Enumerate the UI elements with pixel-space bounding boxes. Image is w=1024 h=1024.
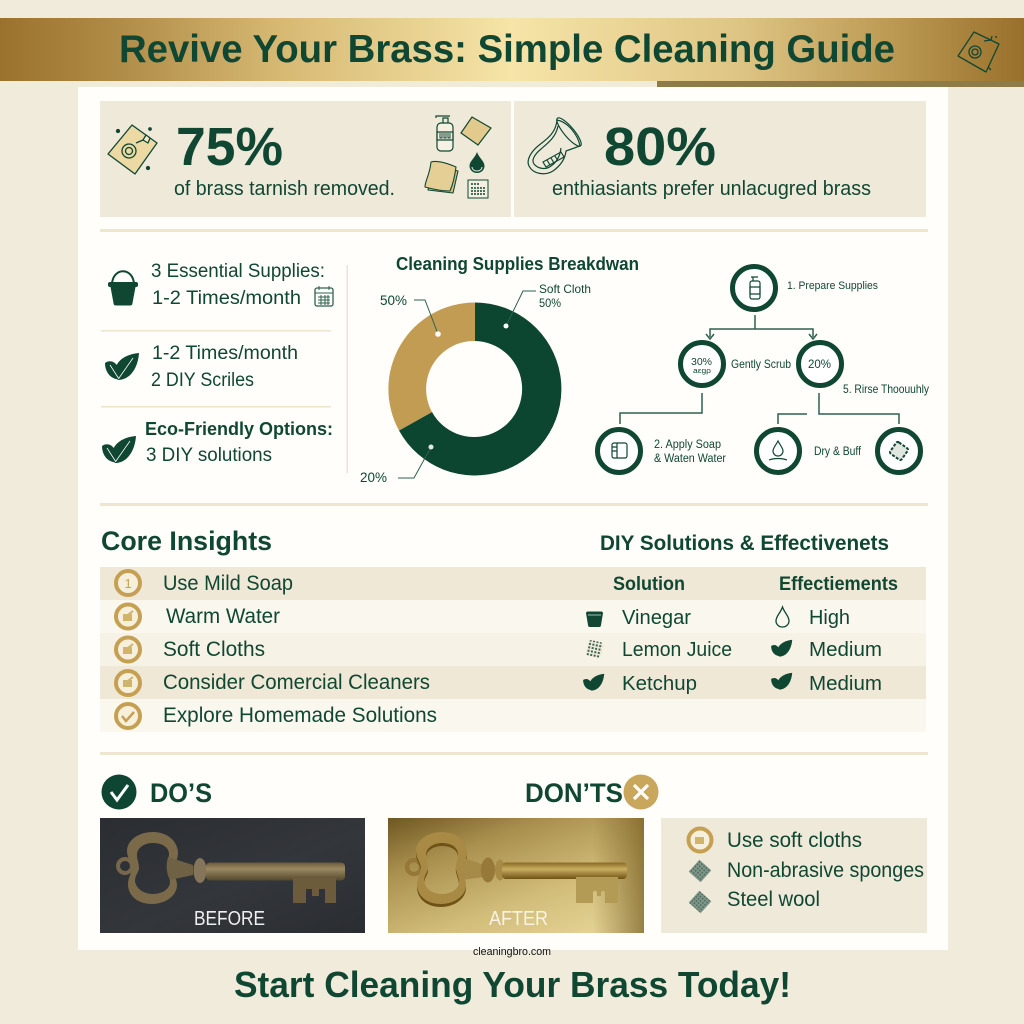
stat value: 75% bbox=[176, 117, 283, 177]
connectors bbox=[620, 315, 899, 424]
column heading: Effectiements bbox=[779, 574, 898, 595]
chart title: Cleaning Supplies Breakdwan bbox=[396, 254, 639, 274]
key tarnished bbox=[118, 832, 345, 904]
icon: leaves bbox=[105, 353, 139, 380]
step circle: prepare bbox=[732, 266, 776, 310]
fact text: 1-2 Times/month bbox=[152, 343, 298, 364]
stat caption: enthiasiants prefer unlacugred brass bbox=[552, 178, 871, 200]
leader: 20 percent bbox=[398, 444, 434, 478]
footer call to action: Start Cleaning Your Brass Today! bbox=[234, 964, 791, 1005]
insight text: Use Mild Soap bbox=[163, 572, 293, 595]
icon: leaves bbox=[771, 640, 792, 657]
donut chart bbox=[360, 254, 639, 485]
panel: recommended materials bbox=[661, 818, 927, 933]
label: 20% bbox=[360, 469, 387, 485]
donut segment: gold bbox=[388, 302, 475, 430]
list text: Use soft cloths bbox=[727, 829, 862, 852]
photo: after key bbox=[388, 818, 644, 933]
insight list bbox=[116, 571, 437, 728]
panel: stat 80 percent bbox=[514, 101, 926, 217]
stat value: 80% bbox=[604, 117, 716, 177]
insight badge 1 bbox=[116, 571, 140, 595]
step label: Gently Scrub bbox=[731, 357, 791, 371]
header banner bbox=[0, 18, 1024, 87]
donut segment: green bbox=[399, 302, 561, 475]
icon: calendar small bbox=[468, 180, 488, 198]
source credit: cleaningbro.com bbox=[473, 946, 551, 958]
fact text: 3 Essential Supplies: bbox=[151, 261, 325, 282]
icon: bucket bbox=[108, 271, 138, 306]
icon: header polish cloth bbox=[958, 32, 999, 72]
heading: core insights: Core Insights bbox=[101, 526, 272, 556]
list text: Non-abrasive sponges bbox=[727, 859, 924, 882]
step label: Dry & Buff bbox=[814, 446, 862, 458]
table cell: Ketchup bbox=[622, 673, 697, 695]
step circle: 30 percent bbox=[680, 342, 724, 386]
icon: sponge bbox=[425, 161, 458, 193]
step label: 1. Prepare Supplies bbox=[787, 280, 878, 292]
icon: leaves bbox=[771, 673, 792, 690]
step circle: buff bbox=[878, 430, 920, 472]
icon: leaves bbox=[102, 436, 136, 463]
table cell: Medium bbox=[809, 673, 882, 695]
icon: polishing cloth bbox=[108, 125, 157, 174]
icon: lemon mesh bbox=[586, 640, 603, 658]
do's heading bbox=[102, 774, 212, 810]
step label: 2. Apply Soap bbox=[654, 439, 721, 451]
insight badge 2 bbox=[116, 604, 140, 628]
heading: DIY solutions: DIY Solutions & Effectivenets bbox=[600, 532, 889, 555]
icon: cloth badge bbox=[688, 828, 712, 852]
label: 50% bbox=[539, 296, 561, 310]
table cell: Vinegar bbox=[622, 607, 691, 629]
don'ts heading bbox=[525, 774, 658, 810]
step circle: 20 percent: 20% bbox=[808, 359, 831, 371]
list text: Steel wool bbox=[727, 888, 820, 911]
insight badge 5 bbox=[116, 704, 140, 728]
insight badge 3 bbox=[116, 638, 140, 662]
icon: sponge mesh bbox=[689, 860, 711, 882]
fact text: 3 DIY solutions bbox=[146, 445, 272, 466]
white content panel bbox=[78, 87, 948, 950]
fact text: 2 DIY Scriles bbox=[151, 370, 254, 391]
DIY table bbox=[583, 574, 898, 695]
don'ts heading: DON’TS bbox=[525, 778, 623, 808]
icon: steel wool mesh bbox=[689, 891, 711, 913]
step label: & Waten Water bbox=[654, 453, 726, 465]
fact heading: Eco-Friendly Options: bbox=[145, 419, 333, 439]
step circle: 30 percent: aεgρ bbox=[693, 368, 711, 375]
icon: brass tuba bbox=[528, 115, 584, 174]
insight badge 4 bbox=[116, 671, 140, 695]
stat caption: of brass tarnish removed. bbox=[174, 178, 395, 200]
leader: 50 percent bbox=[414, 300, 441, 337]
insight badge 1: 1 bbox=[124, 576, 132, 591]
table row bands bbox=[100, 567, 926, 732]
panel: stat 75 percent bbox=[100, 101, 511, 217]
icon: folded cloth bbox=[461, 117, 491, 145]
insight text: Explore Homemade Solutions bbox=[163, 704, 437, 727]
photo: before key bbox=[100, 818, 365, 933]
leader: soft cloth bbox=[504, 291, 536, 328]
icon: drop bbox=[776, 607, 789, 627]
icon: soap bottle bbox=[436, 116, 453, 151]
after label: AFTER bbox=[489, 908, 548, 930]
fact text: 1-2 Times/month bbox=[152, 288, 301, 309]
process flow diagram bbox=[598, 266, 929, 472]
panel: supply facts bbox=[101, 261, 333, 466]
column heading: Solution bbox=[613, 574, 685, 595]
insight text: Warm Water bbox=[166, 605, 280, 628]
icon: vinegar cup bbox=[586, 612, 603, 627]
step circle: 30 percent: 30% bbox=[691, 356, 712, 368]
table cell: High bbox=[809, 607, 850, 629]
key polished bbox=[407, 832, 627, 907]
before label: BEFORE bbox=[194, 908, 265, 930]
icon: leaves bbox=[583, 674, 604, 691]
insight text: Consider Comercial Cleaners bbox=[163, 671, 430, 694]
step label: 5. Rirse Thoouuhly bbox=[843, 382, 929, 396]
icon: calendar bbox=[315, 286, 333, 306]
step circle: 20 percent bbox=[798, 342, 842, 386]
table cell: Lemon Juice bbox=[622, 639, 732, 661]
do's heading: DO’S bbox=[150, 778, 212, 808]
step circle: apply soap bbox=[598, 430, 640, 472]
label: Soft Cloth bbox=[539, 282, 591, 296]
insight text: Soft Cloths bbox=[163, 638, 265, 661]
step circle: rinse bbox=[756, 430, 800, 472]
title: Revive Your Brass: Simple Cleaning Guide bbox=[119, 28, 895, 71]
icon: water drop bbox=[470, 152, 484, 173]
table cell: Medium bbox=[809, 639, 882, 661]
label: 50% bbox=[380, 292, 407, 308]
